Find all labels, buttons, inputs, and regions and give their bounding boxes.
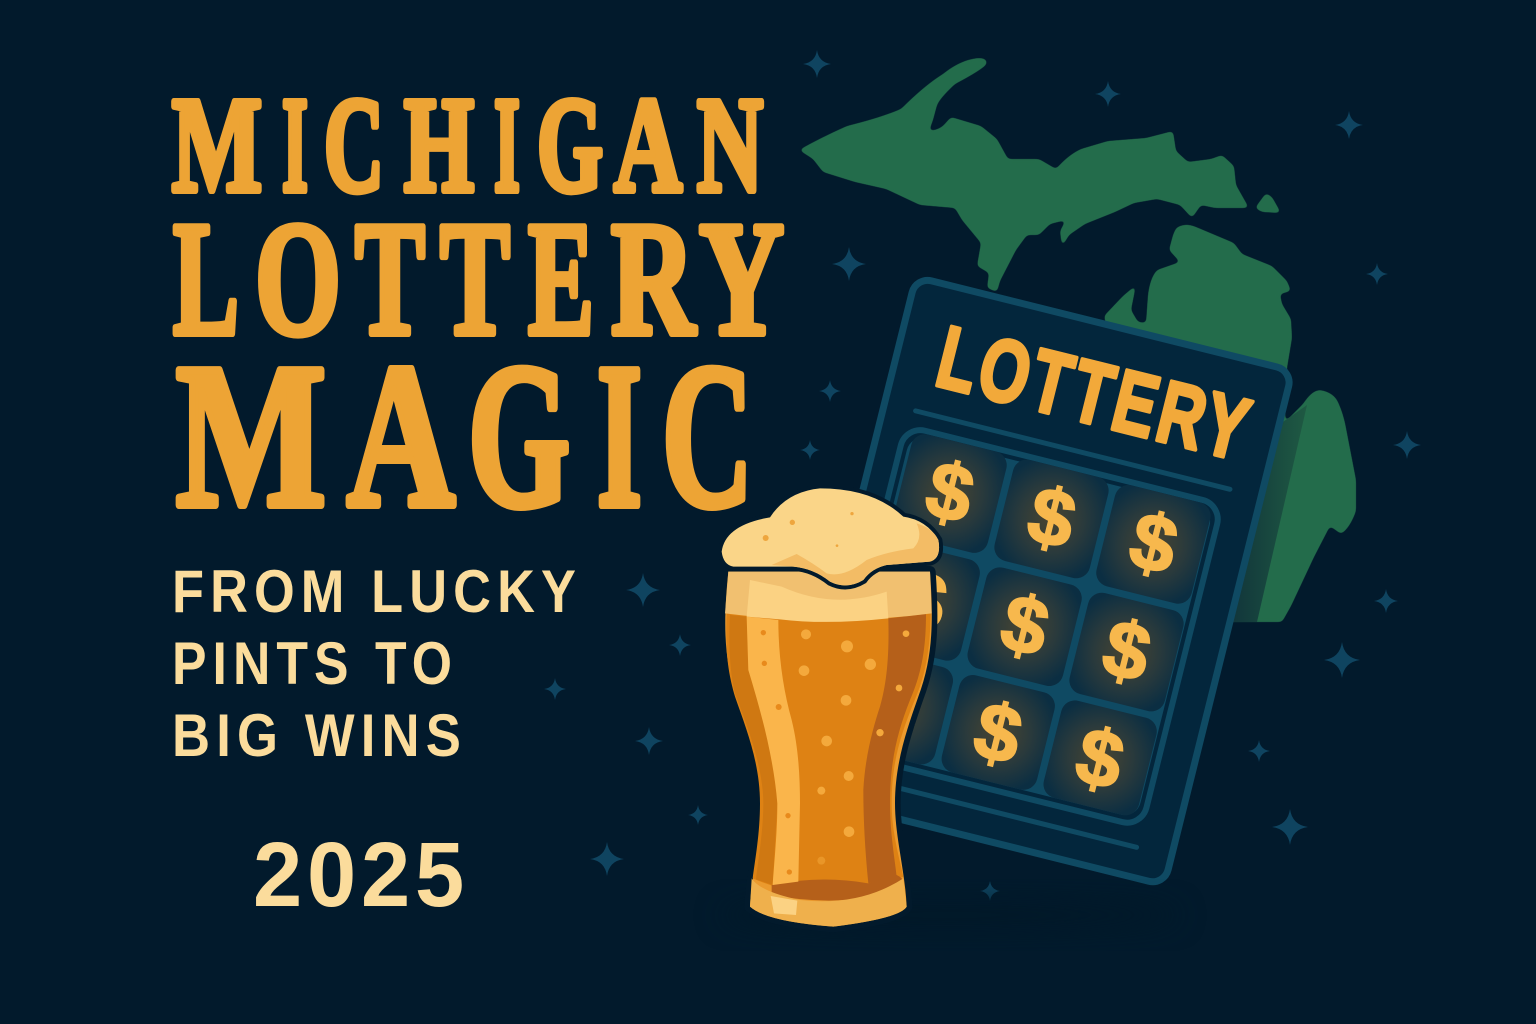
title: L xyxy=(173,190,239,370)
title: H xyxy=(404,70,474,220)
subtitle: BIG WINS xyxy=(172,702,467,769)
title: N xyxy=(697,70,763,220)
scratch grid xyxy=(825,426,1222,827)
ticket heading: LOTTERY xyxy=(928,307,1262,480)
shaded side right xyxy=(863,614,926,883)
subtitle xyxy=(172,558,582,769)
ground shadow xyxy=(720,903,1180,927)
subtitle: PINTS TO xyxy=(172,630,458,697)
ticket body xyxy=(788,277,1292,885)
scratch grid: $ xyxy=(966,684,1030,781)
background stars xyxy=(544,50,1421,901)
bubbles xyxy=(761,629,909,875)
lottery ticket xyxy=(788,277,1292,885)
divider xyxy=(916,411,1230,489)
title: T xyxy=(440,190,510,370)
title: A xyxy=(614,70,682,220)
title: G xyxy=(537,70,603,220)
left highlight xyxy=(747,617,800,885)
card shadow on map xyxy=(1225,405,1307,622)
scratch grid: $ xyxy=(864,659,929,756)
title xyxy=(172,70,784,550)
title: C xyxy=(324,70,384,220)
scratch grid: $ xyxy=(993,577,1057,674)
foam shade xyxy=(772,523,939,585)
title: E xyxy=(528,190,594,370)
upper and lower peninsula xyxy=(799,58,1356,622)
foam band xyxy=(725,572,932,620)
title: I xyxy=(494,70,520,220)
title: M xyxy=(176,321,326,550)
glass base xyxy=(750,878,907,927)
title: R xyxy=(611,190,697,370)
scratch grid: $ xyxy=(1095,602,1159,699)
footer line xyxy=(824,769,1137,847)
title: I xyxy=(282,70,308,220)
scratch grid: $ xyxy=(891,551,955,648)
icon: beer glass xyxy=(722,488,939,927)
scratch grid: $ xyxy=(918,444,982,541)
title: I xyxy=(597,321,642,550)
title: Y xyxy=(699,190,784,370)
scratch grid: $ xyxy=(1019,469,1084,566)
title: T xyxy=(355,190,425,370)
scratch grid: $ xyxy=(1068,710,1132,807)
map: Michigan xyxy=(799,58,1356,622)
title: G xyxy=(468,321,570,550)
glass outline xyxy=(725,572,932,927)
base of beer xyxy=(772,875,903,901)
shaded side left xyxy=(729,615,777,885)
scratch grid: $ xyxy=(1121,494,1186,591)
year: 2025 xyxy=(253,824,469,926)
beer xyxy=(726,613,931,895)
subtitle: FROM LUCKY xyxy=(172,558,582,625)
foam xyxy=(722,488,939,585)
title: C xyxy=(662,321,753,550)
glass body xyxy=(725,572,932,927)
title: A xyxy=(347,321,455,550)
title: O xyxy=(255,190,341,370)
title: M xyxy=(172,70,262,220)
